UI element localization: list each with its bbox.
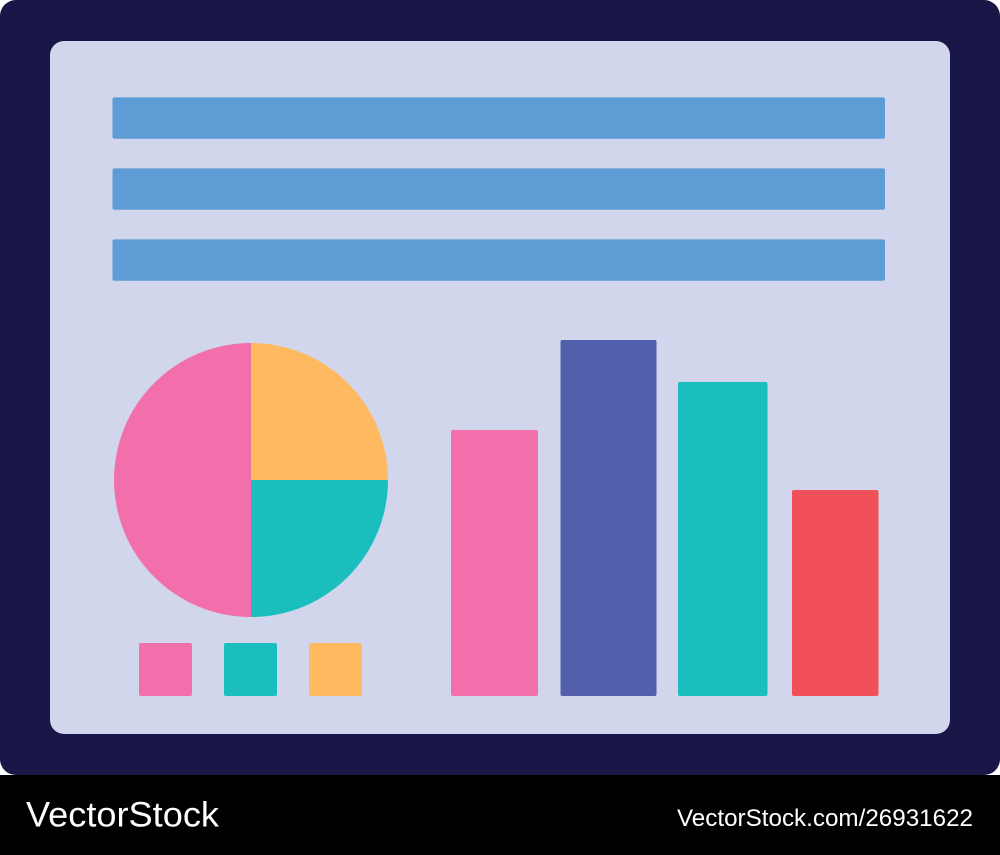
text lines xyxy=(112,97,885,281)
bar chart xyxy=(451,340,878,696)
watermark url: VectorStock.com/26931622 xyxy=(677,805,973,832)
footer band xyxy=(0,775,1000,855)
pie chart xyxy=(114,343,388,617)
pie legend xyxy=(139,643,362,696)
screen panel xyxy=(50,41,950,734)
watermark brand: VectorStock xyxy=(26,794,219,834)
